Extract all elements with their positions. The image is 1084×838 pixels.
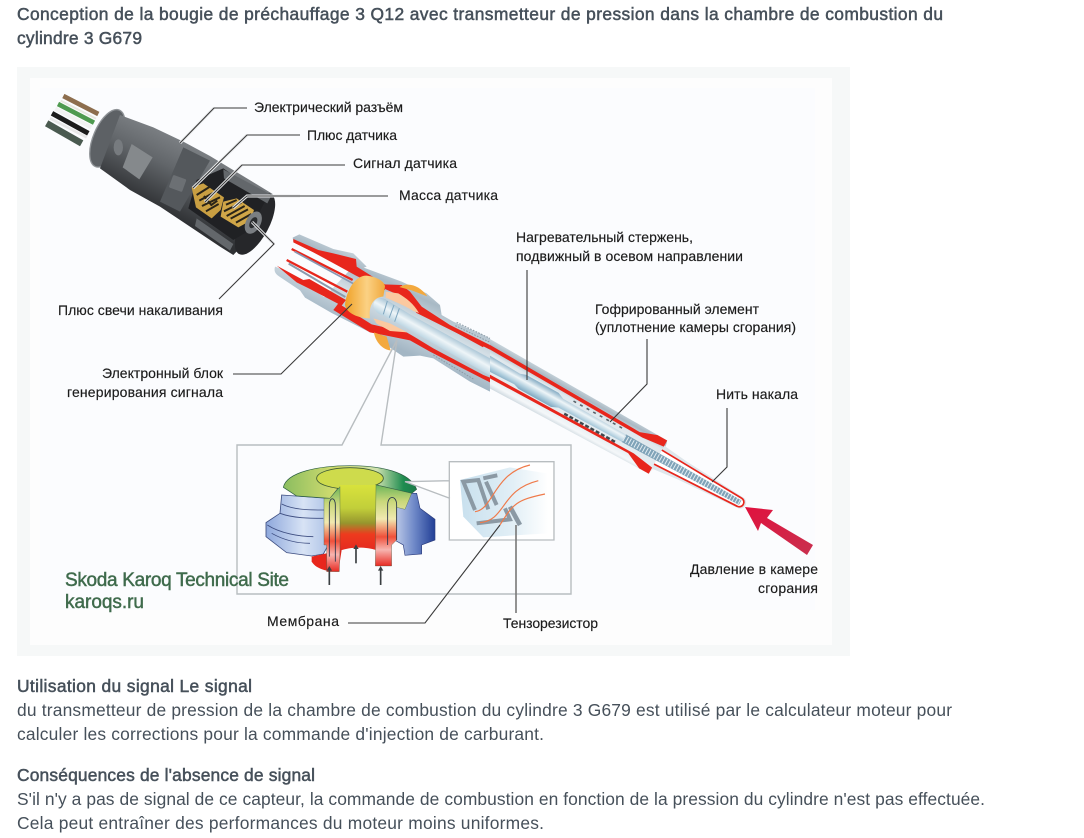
right wall section — [375, 485, 412, 566]
labels: подвижный в осевом направлении — [516, 248, 743, 264]
title: Conception de la bougie de préchauffage 3 Q12 avec transmetteur de pression dans la chambre de combustion du — [17, 4, 943, 24]
lower prong — [275, 267, 374, 332]
labels: Нагревательный стержень, — [516, 229, 693, 245]
labels: Плюс датчика — [307, 127, 397, 143]
pressure arrows — [327, 544, 383, 585]
text block: signal use: du transmetteur de pression de la chambre de combustion du cylindre 3 G679 est utilisé par le calculateur moteur pour — [17, 700, 952, 720]
labels: Сигнал датчика — [353, 155, 457, 171]
text block: missing signal — [17, 765, 985, 833]
labels: (уплотнение камеры сгорания) — [595, 319, 796, 335]
labels: сгорания — [758, 580, 818, 596]
glow plug: rear cutaway — [275, 234, 490, 392]
text block: signal use — [17, 676, 952, 744]
sleeve opening — [227, 187, 283, 261]
body — [100, 115, 273, 255]
heating coil — [622, 434, 742, 506]
text block: missing signal: S'il n'y a pas de signal de ce capteur, la commande de combustion en fonction de la pression du cylindre n'est pas effectuée. — [17, 789, 985, 809]
tip sheath — [654, 450, 747, 511]
front blue section — [266, 495, 328, 556]
labels: Гофрированный элемент — [595, 301, 760, 317]
peach inserts — [386, 292, 419, 313]
membrane sensor detail — [266, 462, 554, 585]
glow plug: tube section — [457, 332, 756, 525]
connector: electrical plug — [47, 96, 283, 261]
flange — [82, 105, 132, 172]
labels: Масса датчика — [399, 187, 498, 203]
gold contacts — [192, 183, 224, 218]
central bore — [317, 468, 383, 489]
orange ring: signal electronics — [345, 276, 385, 318]
sleeve struts — [223, 169, 272, 203]
labels: Электрический разъём — [254, 99, 403, 115]
collar — [160, 147, 210, 212]
shell — [323, 264, 490, 392]
labels: Плюс свечи накаливания — [58, 302, 223, 318]
shoulder before tip — [652, 446, 752, 517]
text block: signal use: calculer les corrections pour la commande d'injection de carburant. — [17, 724, 544, 744]
labels — [58, 99, 818, 631]
labels: Мембрана — [267, 613, 339, 629]
watermark — [65, 570, 289, 613]
title: cylindre 3 G679 — [17, 28, 142, 48]
wires — [47, 96, 98, 143]
orange outer rings — [399, 285, 427, 296]
labels: Тензорезистор — [503, 615, 598, 631]
upper red — [293, 239, 385, 290]
upper prong — [293, 234, 367, 270]
labels: генерирования сигнала — [67, 384, 223, 400]
corrugated element — [574, 401, 622, 428]
rod — [463, 344, 637, 450]
embossed logo — [114, 139, 123, 155]
leader lines — [180, 108, 727, 623]
panel: diagram image — [17, 67, 850, 656]
ring top — [283, 466, 417, 498]
strain gauge inset — [405, 462, 554, 540]
text block: missing signal: Conséquences de l'absence de signal — [17, 765, 315, 785]
text block: signal use: Utilisation du signal Le signal — [17, 676, 252, 696]
labels: Электронный блок — [102, 365, 224, 381]
text block: missing signal: Cela peut entraîner des performances du moteur moins uniformes. — [17, 813, 544, 833]
bottom red — [312, 550, 342, 572]
watermark: karoqs.ru — [65, 592, 144, 613]
title — [17, 4, 943, 48]
middle prongs — [292, 249, 353, 280]
red walls — [472, 335, 667, 449]
labels: Нить накала — [716, 386, 798, 402]
rod — [373, 298, 490, 376]
thread outlines — [433, 327, 483, 370]
outer shell — [457, 332, 671, 477]
left wall section — [324, 487, 340, 572]
watermark: Skoda Karoq Technical Site — [65, 570, 289, 591]
labels: Давление в камере — [690, 561, 818, 577]
callout: magnifier frame — [237, 340, 571, 594]
bottom red wall — [333, 303, 490, 382]
top red wall — [383, 284, 490, 350]
rear blue section — [393, 493, 435, 555]
arrow: combustion pressure — [745, 507, 813, 555]
